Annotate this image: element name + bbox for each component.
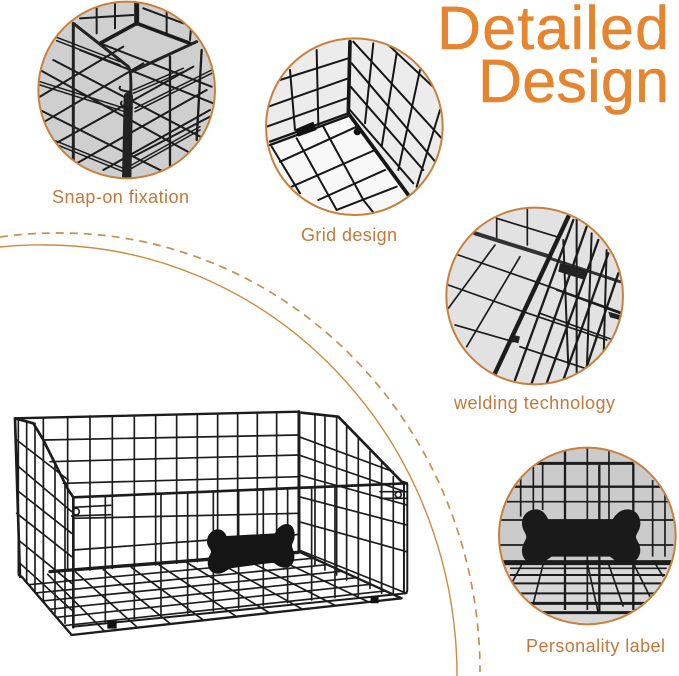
- basket left wall: [15, 418, 73, 623]
- detail circle: snap-on fixation: [38, 2, 215, 180]
- basket back wall: [15, 412, 299, 572]
- icon: bone label: [522, 509, 640, 564]
- basket floor grid: [22, 552, 402, 635]
- label: Snap-on fixation: Snap-on fixation: [52, 187, 189, 207]
- bone name tag: [207, 524, 295, 574]
- title: Detailed Design: [437, 0, 669, 115]
- basket feet: [107, 597, 379, 629]
- label: Personality label: Personality label: [526, 636, 665, 656]
- detail circle: personality label: [497, 448, 677, 627]
- label: Grid design: Grid design: [301, 225, 397, 245]
- title: Detailed Design: Design: [478, 47, 669, 115]
- icon: black clip on rail: [295, 122, 317, 137]
- detail circle: welding technology: [446, 208, 623, 384]
- decorative arc: solid orange: [0, 245, 457, 676]
- label: welding technology: welding technology: [453, 393, 615, 413]
- basket right wall: [299, 413, 407, 593]
- main product: wire basket with bone tag: [15, 412, 407, 635]
- basket front wall: [72, 483, 407, 627]
- detail circle: grid design: [266, 38, 443, 220]
- decorative arc: dashed orange: [0, 233, 480, 672]
